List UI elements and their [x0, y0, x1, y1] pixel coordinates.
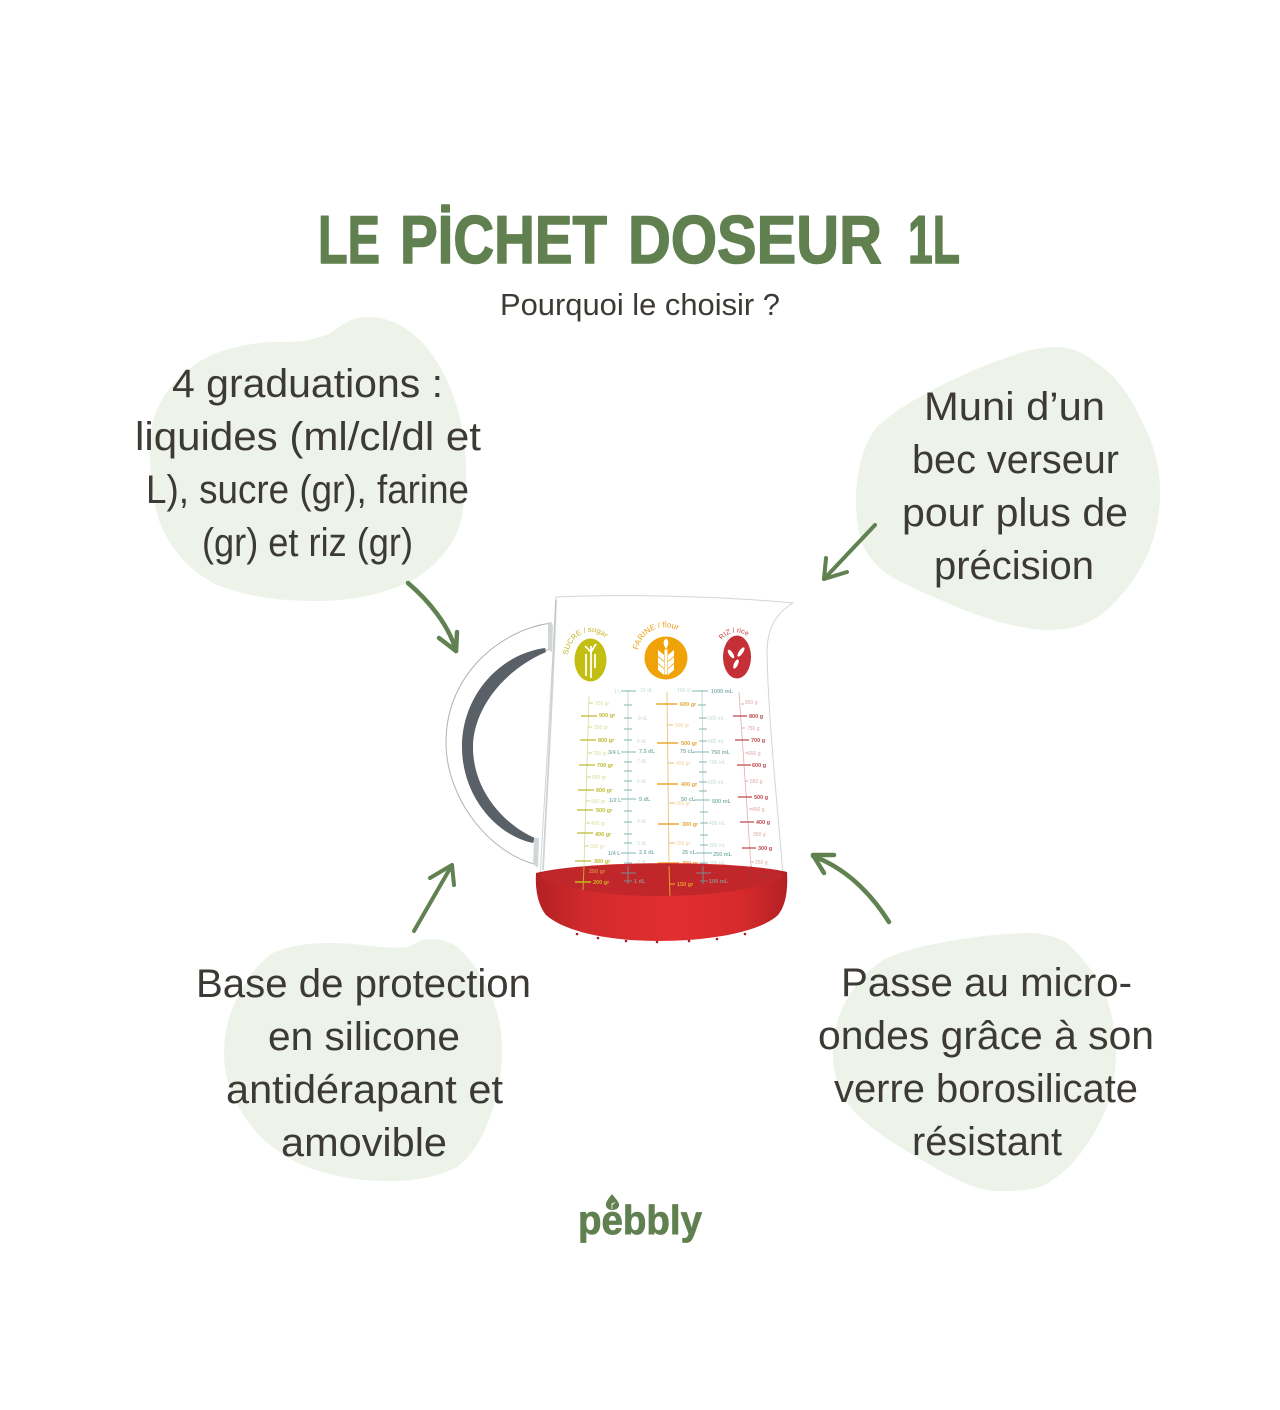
title: LE: [318, 202, 380, 278]
liquid scale left: 4 dL: [637, 819, 647, 825]
flour scale: 400 gr: [681, 782, 698, 788]
flour scale: 550 gr: [675, 723, 690, 729]
sugar scale: 450 gr: [591, 821, 606, 827]
title: DOSEUR: [628, 202, 882, 278]
flour scale: 250 gr: [676, 841, 691, 847]
liquid scale left: 1/2 L: [609, 798, 622, 804]
rice scale: 800 g: [749, 714, 763, 720]
sugar scale: 850 gr: [594, 725, 609, 731]
scales seen through the base: 1 dL: [634, 879, 646, 885]
flour scale: 300 gr: [682, 822, 699, 828]
scales seen through the base: 250 gr: [589, 869, 606, 875]
arrow: graduations: [408, 583, 457, 651]
logo: pebbly: pebbly: [578, 1197, 702, 1243]
liquid scale right: 1000 mL: [711, 689, 734, 695]
sugar scale: 400 gr: [595, 832, 612, 838]
liquid scale left: 7.5 dL: [639, 749, 656, 755]
glass body: [540, 596, 793, 875]
panel: base silicone: Base de protection: [196, 962, 531, 1006]
panel: graduations: liquides (ml/cl/dl et: [135, 415, 481, 459]
liquid scale right: 800 mL: [708, 739, 725, 745]
liquid scale right: 25 cL: [682, 850, 697, 856]
sugar scale: 600 gr: [596, 788, 613, 794]
liquid scale left: 9 dL: [638, 716, 648, 722]
panel: micro-ondes: [818, 933, 1154, 1191]
liquid scale left: 10 dL: [640, 688, 653, 694]
liquid scale right: 75 cL: [680, 749, 695, 755]
icon: sugar cane: SUCRE / sugar: [563, 627, 608, 654]
scales seen through the base: 200 g: [760, 874, 774, 880]
sugar scale: 350 gr: [590, 844, 605, 850]
liquid scale right: 500 mL: [712, 799, 732, 805]
liquid scale right: 600 mL: [708, 780, 725, 786]
flour scale: 350 gr: [676, 801, 691, 807]
liquid scale left: 8 dL: [637, 739, 647, 745]
panel: micro-ondes: verre borosilicate: [834, 1067, 1138, 1111]
panel: micro-ondes: Passe au micro-: [841, 961, 1132, 1005]
panel: base silicone: amovible: [281, 1121, 447, 1165]
panel: bec verseur: bec verseur: [912, 438, 1119, 482]
panel: graduations: L), sucre (gr), farine: [146, 468, 469, 512]
liquid scale right: 300 mL: [709, 843, 726, 849]
rice scale: 250 g: [755, 860, 768, 866]
rice scale: 400 g: [756, 820, 770, 826]
rice scale: 350 g: [753, 832, 766, 838]
panel: base silicone: antidérapant et: [226, 1068, 503, 1112]
title: PİCHET: [400, 202, 607, 278]
panel: bec verseur: précision: [934, 544, 1094, 588]
panel: base silicone: en silicone: [268, 1015, 460, 1059]
panel: bec verseur: Muni d’un: [924, 385, 1105, 429]
panel: micro-ondes: résistant: [912, 1120, 1062, 1164]
flour scale: 450 gr: [676, 761, 691, 767]
scales seen through the base: 100 mL: [709, 879, 729, 885]
liquid scale left: 6 dL: [637, 779, 647, 785]
icon: wheat: [632, 622, 688, 680]
title: 1L: [908, 202, 960, 278]
subtitle: Pourquoi le choisir ?: [500, 287, 780, 322]
pitcher: [446, 595, 794, 944]
sugar scale: 550 gr: [591, 799, 606, 805]
liquid scale right: 900 mL: [708, 716, 725, 722]
sugar scale: 500 gr: [596, 808, 613, 814]
silicone base: [536, 863, 787, 943]
sugar scale: 300 gr: [594, 859, 611, 865]
rice scale: [733, 692, 772, 866]
icon: wheat: FARINE / flour: [632, 622, 680, 650]
flour scale: [656, 692, 699, 867]
liquid scale left: 7 dL: [637, 759, 647, 765]
rice scale: 500 g: [754, 795, 768, 801]
liquid scale right: 50 cL: [681, 797, 696, 803]
liquid scale left: 5 dL: [639, 797, 651, 803]
liquid scale right: 700 mL: [709, 760, 726, 766]
icon: rice: RIZ / rice: [718, 628, 748, 640]
icon: leaf: [606, 1194, 619, 1210]
panel: base silicone: [196, 939, 531, 1181]
liquid scale right: [677, 688, 734, 867]
rice scale: 550 g: [750, 779, 763, 785]
panel: bec verseur: [856, 347, 1160, 630]
liquid scale left: 1/4 L: [608, 851, 621, 857]
panel: micro-ondes: ondes grâce à son: [818, 1014, 1154, 1058]
rice scale: 450 g: [752, 807, 765, 813]
liquid scale right: 100 cL: [677, 688, 692, 694]
arrow: base silicone: [414, 865, 454, 931]
flour scale: 600 gr: [680, 702, 697, 708]
arrow: micro-ondes: [813, 855, 889, 922]
rice scale: 300 g: [758, 846, 772, 852]
icon: sugar cane: [563, 627, 608, 682]
panel: bec verseur: pour plus de: [902, 491, 1128, 535]
flour scale: 200 gr: [682, 861, 699, 867]
sugar scale: [575, 696, 616, 866]
rice scale: 650 g: [748, 751, 761, 757]
flour scale: 500 gr: [681, 741, 698, 747]
title: [318, 202, 960, 278]
panel: graduations: (gr) et riz (gr): [202, 521, 413, 565]
icon: rice: [718, 628, 751, 678]
liquid scale left: 2.5 dL: [639, 850, 656, 856]
liquid scale left: 3/4 L: [608, 750, 621, 756]
liquid scale right: 200 mL: [709, 861, 726, 867]
sugar scale: 900 gr: [599, 713, 616, 719]
liquid scale right: 750 mL: [711, 750, 731, 756]
liquid scale left: 2 dL: [637, 860, 647, 866]
sugar scale: 700 gr: [597, 763, 614, 769]
sugar scale: 800 gr: [598, 738, 615, 744]
rice scale: 700 g: [751, 738, 765, 744]
sugar scale: 650 gr: [592, 775, 607, 781]
sugar scale: 950 gr: [595, 701, 610, 707]
liquid scale left: [608, 688, 656, 866]
arrow: bec verseur: [824, 525, 875, 579]
scales seen through the base: 200 gr: [593, 880, 610, 886]
liquid scale left: 1 L: [614, 689, 621, 695]
handle: [446, 622, 553, 868]
liquid scale right: 250 mL: [713, 852, 733, 858]
liquid scale left: 3 dL: [637, 841, 647, 847]
liquid scale right: 400 mL: [709, 821, 726, 827]
panel: graduations: 4 graduations :: [172, 362, 443, 406]
rice scale: 600 g: [752, 763, 766, 769]
scales seen through the base: [575, 866, 774, 896]
glass left highlight: [543, 600, 556, 870]
sugar scale: 750 gr: [593, 751, 608, 757]
rice scale: 850 g: [745, 700, 758, 706]
scales seen through the base: 150 gr: [677, 882, 694, 888]
rice scale: 750 g: [747, 726, 760, 732]
panel: graduations: [135, 317, 481, 601]
